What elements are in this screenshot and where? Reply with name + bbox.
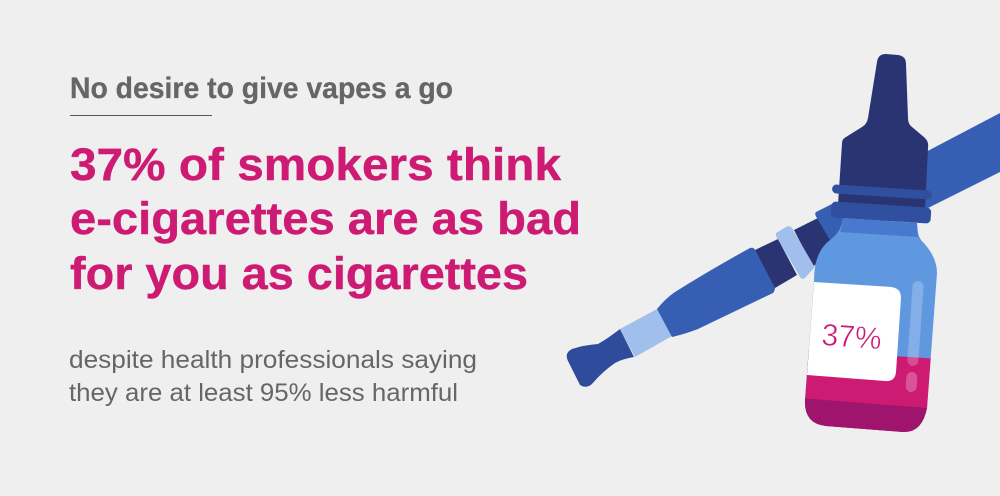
vape grip	[657, 248, 775, 337]
dropper cap	[838, 54, 928, 210]
vape light band	[620, 309, 672, 357]
supporting text: they are at least 95% less harmful	[69, 379, 458, 407]
bottle body	[805, 218, 937, 432]
label	[807, 282, 901, 381]
vape long barrel	[920, 113, 1000, 212]
bottle neck shade	[840, 218, 918, 237]
illustration: vape pen	[567, 113, 1000, 387]
headline statistic: for you as cigarettes	[70, 248, 528, 299]
headline statistic: 37% of smokers think	[70, 139, 562, 190]
vape mouthpiece tip	[567, 329, 634, 387]
liquid shade	[804, 398, 927, 432]
supporting text: despite health professionals saying	[69, 346, 477, 374]
vape light ring	[776, 226, 814, 279]
label value: 37%	[821, 317, 883, 356]
headline statistic: e-cigarettes are as bad	[70, 193, 581, 244]
heading: No desire to give vapes a go: No desire to give vapes a go	[70, 72, 453, 105]
headline statistic	[70, 139, 581, 299]
vape dark section	[755, 239, 797, 288]
cap ring upper	[832, 184, 932, 200]
illustration: e-liquid bottle	[800, 54, 940, 440]
bottle highlights	[907, 281, 924, 366]
vape collar	[815, 203, 846, 240]
liquid	[804, 350, 931, 432]
supporting text	[69, 346, 477, 407]
cap ring lower	[831, 201, 931, 224]
